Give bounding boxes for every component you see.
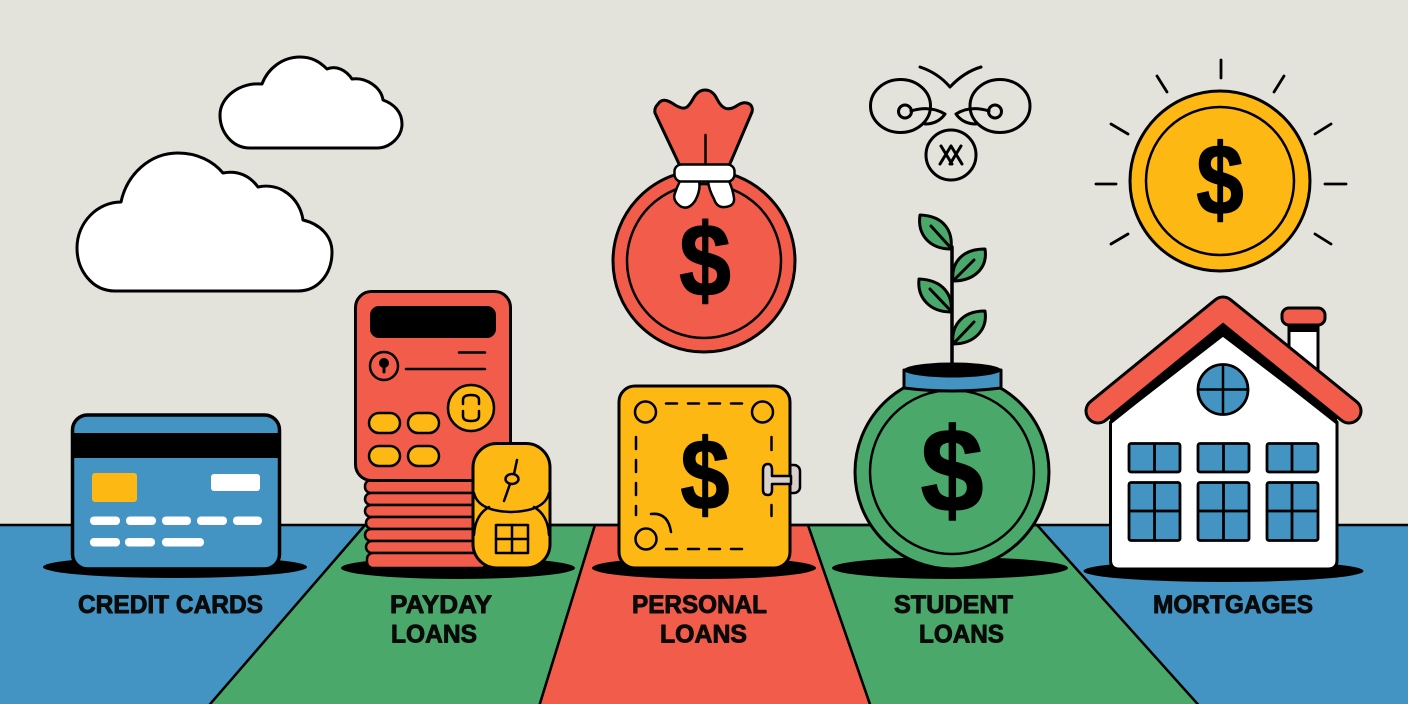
coin xyxy=(613,170,795,352)
horizon line xyxy=(0,524,1408,526)
ground: left green path xyxy=(205,525,595,704)
sun rays xyxy=(1096,60,1346,244)
shadow xyxy=(43,556,307,578)
windows xyxy=(1129,444,1318,540)
handle back tab xyxy=(786,465,800,493)
label: personal loans xyxy=(632,591,767,648)
abstract owl face icon xyxy=(870,67,1030,180)
inner ring xyxy=(870,390,1034,554)
calculator body xyxy=(356,292,510,480)
label: mortgages: MORTGAGES xyxy=(1153,591,1313,619)
leaves xyxy=(919,215,985,344)
dollar sign: $ xyxy=(921,403,983,537)
mortgages house xyxy=(1084,308,1364,582)
label: payday loans xyxy=(390,591,492,648)
student loans jar with plant xyxy=(832,215,1068,579)
label: personal loans: PERSONAL xyxy=(632,591,767,619)
label: payday loans: PAYDAY xyxy=(390,591,492,619)
ground: right green path xyxy=(808,525,1203,704)
coin xyxy=(1130,91,1310,271)
card body xyxy=(72,415,280,569)
payday loans group xyxy=(341,292,575,579)
inner ring xyxy=(627,184,781,338)
signature box xyxy=(211,474,260,491)
small cloud xyxy=(220,57,402,148)
ground with colored paths xyxy=(0,525,1408,704)
round window xyxy=(1198,364,1248,414)
roof xyxy=(1098,309,1349,411)
credit card group xyxy=(43,415,307,578)
ground: red center path xyxy=(538,525,872,704)
label: payday loans: LOANS xyxy=(391,620,477,648)
jar opening xyxy=(904,362,1001,378)
chimney xyxy=(1289,325,1318,385)
shadow xyxy=(832,557,1068,579)
roof underside xyxy=(1110,318,1337,425)
shadow xyxy=(592,557,816,579)
sun coin xyxy=(1096,60,1346,271)
chip xyxy=(92,473,137,502)
keyhole dial xyxy=(370,352,398,380)
money bag coin xyxy=(613,90,795,352)
roof outline xyxy=(1098,309,1349,411)
label: student loans: STUDENT xyxy=(894,591,1013,619)
label: credit cards: CREDIT CARDS xyxy=(78,591,263,619)
label: student loans: LOANS xyxy=(919,620,1004,648)
ribbon tails xyxy=(674,181,734,208)
dollar sign: $ xyxy=(1196,123,1244,236)
stem xyxy=(950,247,954,362)
stacked strips xyxy=(365,480,487,568)
house body xyxy=(1110,335,1337,569)
display lines xyxy=(406,352,485,369)
safe body xyxy=(619,386,790,568)
bag top xyxy=(655,90,752,166)
ribbon band xyxy=(674,164,734,182)
label: student loans xyxy=(894,591,1013,648)
corner bolts xyxy=(635,402,773,550)
label: personal loans: LOANS xyxy=(660,620,747,648)
dollar sign: $ xyxy=(681,419,729,530)
chimney cap xyxy=(1282,308,1325,325)
handle xyxy=(763,464,791,495)
keypad xyxy=(369,413,439,466)
number dashes xyxy=(90,516,262,546)
coin jar xyxy=(855,375,1049,569)
personal loans safe xyxy=(592,386,816,579)
shadow xyxy=(1084,560,1364,582)
ground: blue xyxy=(0,525,1408,704)
dashed seam xyxy=(636,404,772,549)
yellow device xyxy=(473,444,550,568)
jar neck xyxy=(904,370,1001,391)
yellow lock button xyxy=(448,385,494,431)
magnetic stripe xyxy=(72,433,280,458)
shadow xyxy=(341,557,575,579)
inner ring xyxy=(1146,107,1294,255)
calculator screen xyxy=(370,306,496,338)
large cloud xyxy=(77,153,332,291)
dollar sign: $ xyxy=(679,202,731,318)
